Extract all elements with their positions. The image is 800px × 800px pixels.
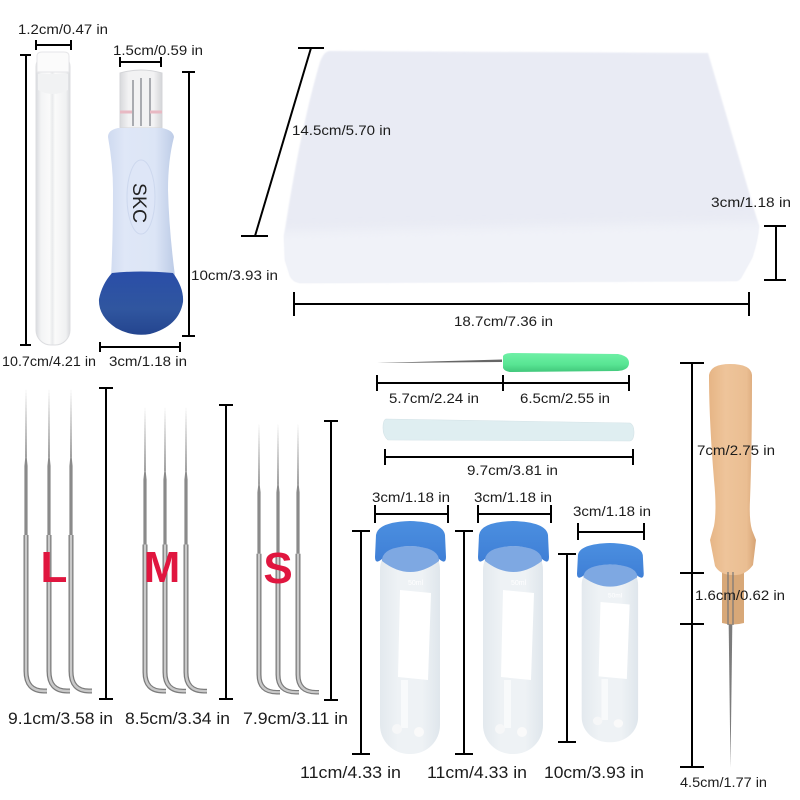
letter S: S — [263, 544, 293, 593]
ferrule — [722, 570, 744, 624]
height label: 11cm/4.33 in — [300, 763, 401, 782]
dimension — [219, 405, 233, 699]
vial — [478, 521, 549, 754]
glue rod with dimensions — [383, 419, 634, 478]
width label: 3cm/1.18 in — [573, 503, 651, 519]
label: 9.1cm/3.58 in — [8, 709, 113, 728]
dimension — [377, 375, 629, 391]
thickness label: 3cm/1.18 in — [711, 194, 791, 210]
logo oval — [127, 160, 155, 234]
letter M: M — [144, 543, 180, 592]
needles — [143, 406, 207, 691]
width dimension — [294, 292, 749, 316]
width label: 3cm/1.18 in — [372, 489, 450, 505]
depth dimension — [241, 48, 324, 236]
needles — [257, 423, 319, 692]
label: 8.5cm/3.34 in — [125, 709, 230, 728]
height label: 10cm/3.93 in — [544, 763, 644, 782]
width dimension — [36, 40, 71, 50]
needles size L — [8, 388, 113, 728]
width dimension — [478, 505, 551, 523]
width dimension — [375, 505, 448, 523]
dimension — [680, 363, 704, 767]
felting tool with dimensions — [99, 42, 278, 369]
blue dome — [99, 272, 183, 335]
height dimension — [352, 531, 370, 754]
height label: 10.7cm/4.21 in — [2, 353, 96, 369]
upper label: 7cm/2.75 in — [697, 442, 775, 458]
depth label: 14.5cm/5.70 in — [292, 122, 391, 138]
vial — [375, 521, 446, 754]
width label: 1.2cm/0.47 in — [18, 21, 108, 37]
left label: 5.7cm/2.24 in — [389, 390, 479, 406]
bottom label: 3cm/1.18 in — [109, 353, 187, 369]
vial 1 with dimensions — [300, 489, 450, 782]
middle label: 1.6cm/0.62 in — [695, 587, 785, 603]
wood handle — [709, 364, 756, 575]
SKC logo: SKC — [128, 183, 149, 223]
letter L: L — [41, 543, 67, 592]
right label: 6.5cm/2.55 in — [520, 390, 610, 406]
clear needle holder — [120, 70, 162, 128]
dimension — [324, 421, 338, 700]
bottom dimension — [100, 342, 180, 352]
needles size M — [125, 405, 233, 728]
green needle with dimensions — [377, 353, 629, 406]
needle shaft — [377, 360, 502, 363]
tube — [36, 52, 70, 345]
needle pair over ferrule — [728, 572, 733, 625]
wooden needle tool with dimensions — [680, 363, 785, 790]
top label: 1.5cm/0.59 in — [113, 42, 203, 58]
vial — [577, 543, 644, 742]
rod — [383, 419, 634, 441]
lower label: 4.5cm/1.77 in — [680, 774, 767, 790]
height label: 11cm/4.33 in — [427, 763, 527, 782]
dimension — [385, 449, 633, 465]
foam block with dimensions — [241, 48, 791, 329]
thickness dimension — [764, 226, 786, 280]
vial 3 with dimensions — [544, 503, 651, 782]
needle tube with dimensions — [2, 21, 108, 369]
height dimension — [20, 55, 31, 345]
foam block — [284, 51, 759, 283]
needles size S — [243, 421, 348, 728]
height label: 10cm/3.93 in — [191, 267, 278, 283]
needle — [728, 570, 733, 768]
top dimension — [120, 57, 161, 67]
green handle — [503, 353, 629, 372]
width label: 3cm/1.18 in — [474, 489, 552, 505]
height dimension — [558, 554, 576, 742]
blue handle — [108, 128, 175, 276]
height dimension — [182, 72, 195, 336]
label: 9.7cm/3.81 in — [467, 462, 558, 478]
width label: 18.7cm/7.36 in — [454, 313, 553, 329]
height dimension — [455, 531, 473, 754]
needles — [24, 388, 92, 691]
vial 2 with dimensions — [427, 489, 552, 782]
label: 7.9cm/3.11 in — [243, 709, 348, 728]
width dimension — [578, 523, 644, 540]
dimension — [99, 388, 113, 699]
